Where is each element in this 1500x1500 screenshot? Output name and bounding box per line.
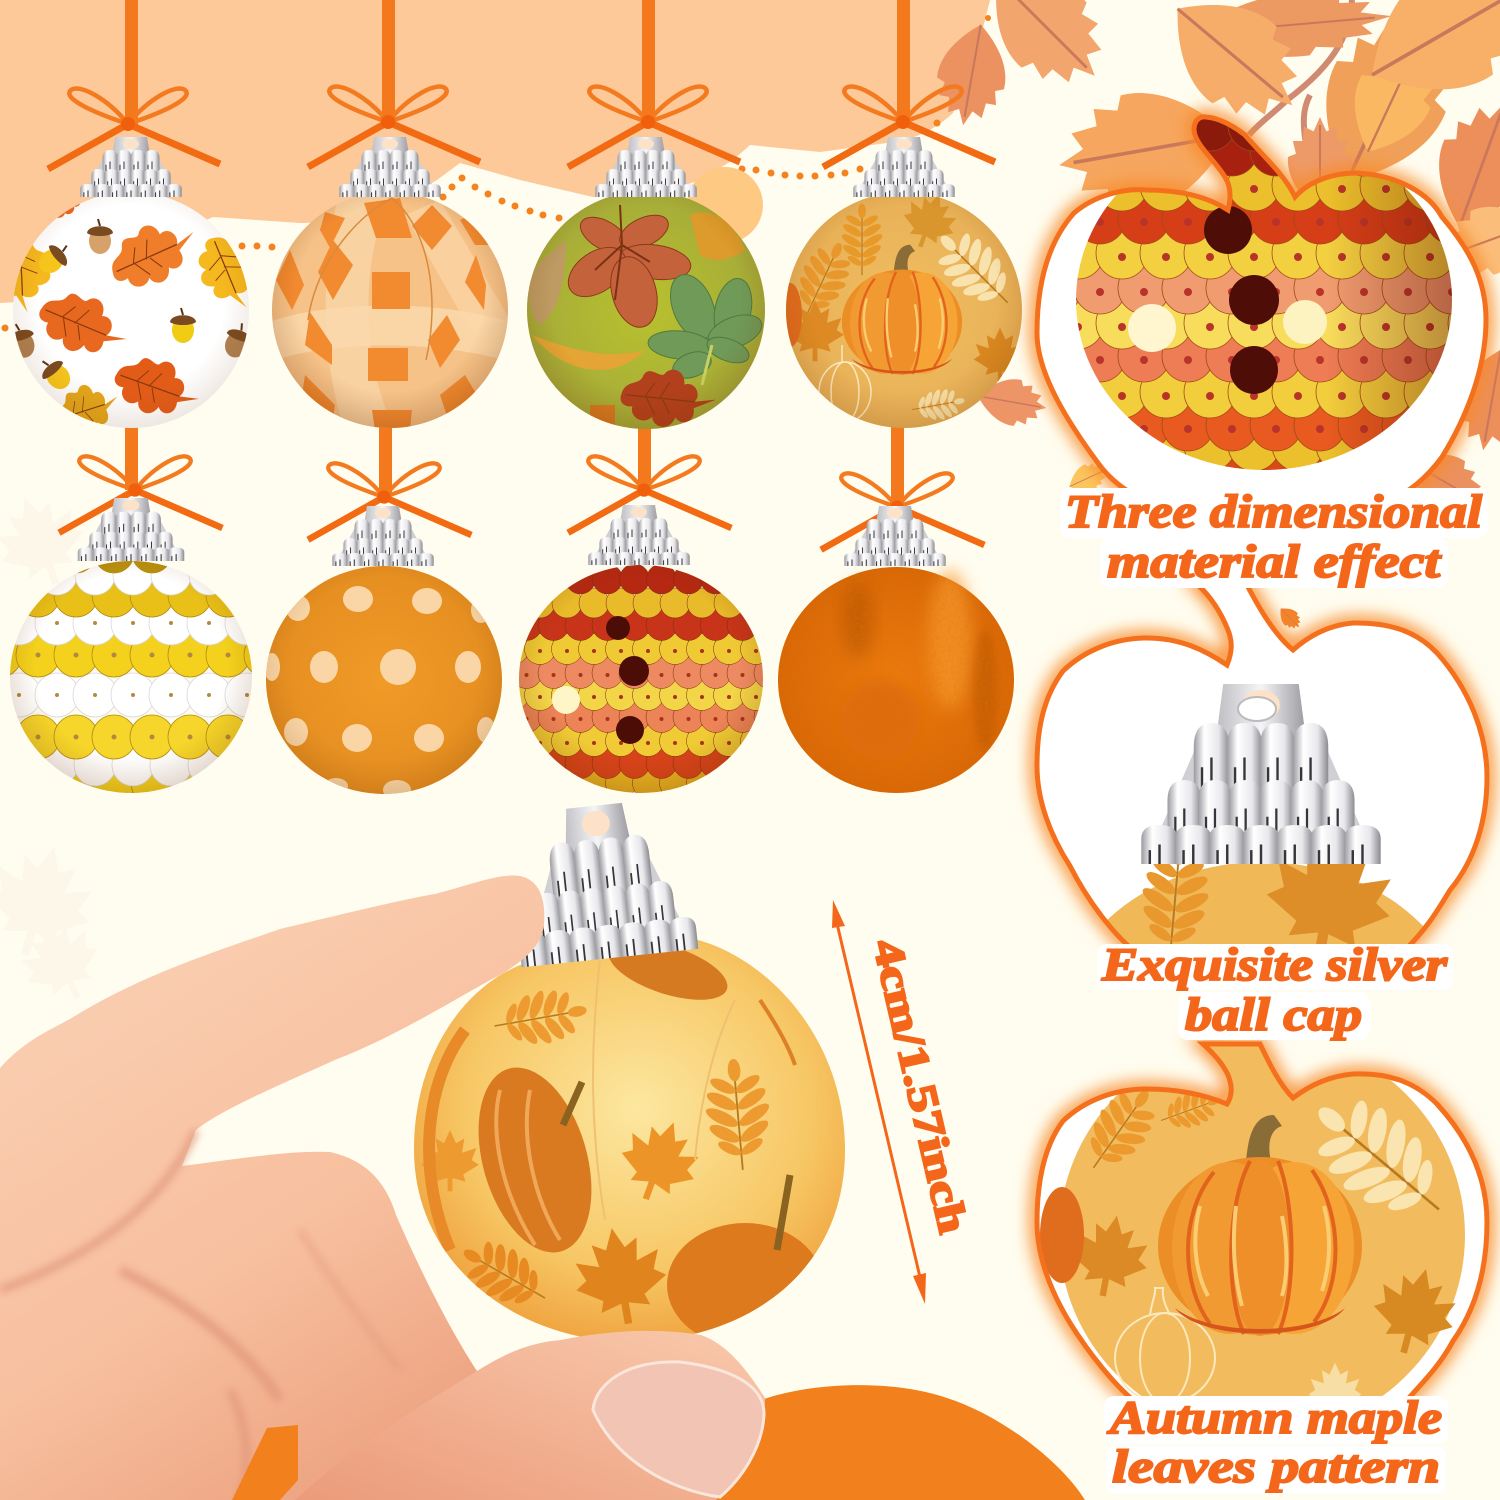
dark and pale sequins <box>1128 206 1327 394</box>
heading: exquisite silver ball cap: ball cap <box>1185 989 1362 1041</box>
ornament: orange velvet <box>778 567 1014 793</box>
orange wedge between fingers <box>232 1425 298 1500</box>
heading: autumn maple leaves pattern <box>1104 1392 1448 1494</box>
faint background leaves <box>0 483 112 1014</box>
ornament: yellow with pumpkin <box>786 197 1022 428</box>
panel: autumn maple leaves pattern callout <box>1037 1030 1487 1435</box>
ornament: white and gold sequins <box>10 561 252 793</box>
ornament: green with autumn leaves <box>527 191 766 434</box>
hand creases <box>0 1130 400 1500</box>
heading: exquisite silver ball cap: Exquisite silver <box>1101 939 1448 991</box>
ornament: red and gold sequins <box>519 565 763 793</box>
heading: autumn maple leaves pattern: Autumn maple <box>1107 1392 1442 1444</box>
thumbnail <box>593 1362 764 1497</box>
bows, top and bottom rows <box>48 87 995 550</box>
silver cap of big ornament <box>506 797 698 967</box>
heading: autumn maple leaves pattern: leaves pattern <box>1112 1441 1440 1493</box>
peach top banner shape <box>0 0 990 303</box>
ornament: white with oak leaves and acorns <box>13 197 249 428</box>
panel: three dimensional material callout <box>1037 110 1486 500</box>
silver ball caps on ornaments <box>78 137 955 566</box>
orange blob, bottom <box>700 1385 1085 1500</box>
ornament: orange gingham <box>270 190 510 430</box>
dotted garland line <box>2 15 991 332</box>
heading: exquisite silver ball cap <box>1097 939 1453 1041</box>
pale leaf behind ball row <box>687 167 763 243</box>
heading: three dimensional material effect <box>1060 486 1488 588</box>
panel: silver ball cap callout <box>1016 588 1500 946</box>
heading: three dimensional material effect: Three dimensional <box>1065 486 1482 538</box>
autumn leaves and branch, top right <box>930 0 1500 634</box>
thumb <box>295 1331 765 1500</box>
ribbons of top row <box>125 0 910 505</box>
big ornament held in hand <box>414 928 845 1347</box>
hand: palm and middle finger <box>0 894 500 1500</box>
heading: three dimensional material effect: material effect <box>1107 536 1442 588</box>
size label: 4cm/1.57inch <box>863 935 976 1238</box>
size arrow <box>832 900 926 1304</box>
index finger over the cap <box>280 876 544 1059</box>
ornament: orange polka dots <box>264 566 502 800</box>
